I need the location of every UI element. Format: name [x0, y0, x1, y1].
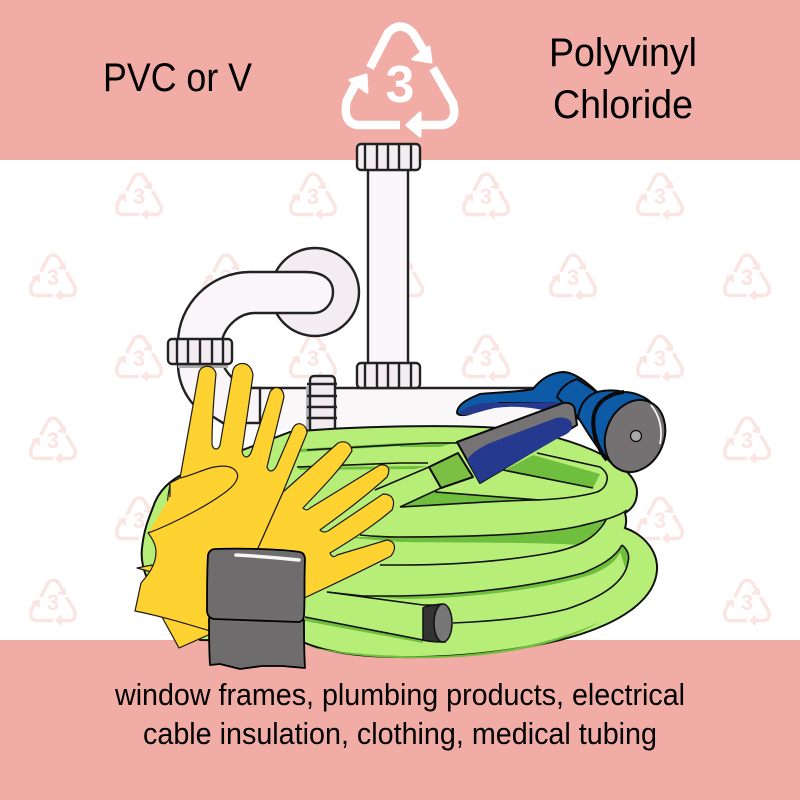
trigger lever — [457, 372, 597, 420]
glove thumb — [148, 466, 238, 533]
elbow collar — [168, 338, 232, 365]
illustration: PVC pipes — [168, 143, 540, 432]
watermark pattern: faint recycling code 3 symbols: 3 — [47, 428, 59, 453]
illustration: hose end connector — [423, 604, 452, 642]
watermark pattern: faint recycling code 3 symbols: 3 — [47, 265, 59, 290]
grey grip — [457, 403, 577, 483]
caption: uses of PVC — [114, 677, 685, 751]
illustration: grey duct tape roll — [207, 549, 305, 669]
wall flange disc — [271, 248, 359, 336]
watermark pattern: faint recycling code 3 symbols — [31, 174, 769, 625]
watermark pattern: faint recycling code 3 symbols: 3 — [133, 184, 145, 209]
hose neck to nozzle — [375, 467, 441, 507]
right glove — [250, 442, 394, 610]
nozzle highlight — [651, 405, 661, 444]
icon: recycling code 3 — [346, 26, 454, 136]
top banner — [0, 0, 800, 160]
back cuff flap — [137, 565, 215, 648]
heading: Polyvinyl Chloride: Polyvinyl — [549, 31, 697, 75]
watermark pattern: faint recycling code 3 symbols: 3 — [47, 590, 59, 615]
illustration: green garden hose — [142, 426, 657, 658]
heading: Polyvinyl Chloride: Chloride — [553, 83, 693, 127]
bottom banner — [0, 640, 800, 800]
watermark pattern: faint recycling code 3 symbols: 3 — [741, 590, 753, 615]
watermark pattern: faint recycling code 3 symbols: 3 — [567, 265, 579, 290]
top collar — [357, 143, 420, 171]
left glove — [135, 363, 307, 640]
blue grip — [467, 417, 572, 483]
heading: PVC or V: PVC or V — [103, 56, 252, 100]
watermark pattern: faint recycling code 3 symbols: 3 — [480, 184, 492, 209]
watermark pattern: faint recycling code 3 symbols: 3 — [654, 508, 666, 533]
watermark pattern: faint recycling code 3 symbols: 3 — [307, 346, 319, 371]
tape highlight — [236, 555, 299, 560]
green neck — [429, 453, 473, 488]
watermark pattern: faint recycling code 3 symbols: 3 — [307, 184, 319, 209]
hose coil outlines — [307, 443, 457, 450]
icon: recycling code 3: 3 — [386, 56, 414, 114]
bottom collar — [357, 362, 420, 389]
nozzle head — [578, 390, 652, 470]
heading: Polyvinyl Chloride — [549, 31, 697, 127]
watermark pattern: faint recycling code 3 symbols: 3 — [654, 184, 666, 209]
illustration: spray nozzle — [429, 372, 676, 488]
nozzle ring — [593, 392, 624, 460]
horizontal pipe — [230, 388, 540, 430]
caption: uses of PVC: cable insulation, clothing, medical tubing — [143, 716, 657, 751]
elbow shadow — [178, 364, 228, 368]
nozzle hole — [630, 430, 642, 442]
watermark pattern: faint recycling code 3 symbols: 3 — [133, 508, 145, 533]
nozzle face — [594, 391, 676, 481]
watermark pattern: faint recycling code 3 symbols: 3 — [741, 265, 753, 290]
tape lower band — [209, 618, 305, 669]
caption: uses of PVC: window frames, plumbing products, electrical — [114, 677, 685, 712]
curved elbow pipe — [178, 272, 333, 423]
nozzle shoulder — [557, 379, 597, 417]
hose coil shadows — [297, 442, 629, 658]
watermark pattern: faint recycling code 3 symbols: 3 — [480, 346, 492, 371]
watermark pattern: faint recycling code 3 symbols: 3 — [654, 346, 666, 371]
watermark pattern: faint recycling code 3 symbols: 3 — [394, 265, 406, 290]
watermark pattern: faint recycling code 3 symbols: 3 — [220, 265, 232, 290]
junction collar — [306, 376, 337, 432]
watermark pattern: faint recycling code 3 symbols: 3 — [741, 428, 753, 453]
illustration: yellow rubber gloves — [135, 363, 394, 648]
watermark pattern: faint recycling code 3 symbols: 3 — [133, 346, 145, 371]
tape upper band — [207, 549, 305, 622]
trigger underside — [460, 402, 560, 415]
hose silhouette — [142, 426, 657, 657]
vertical pipe — [368, 168, 408, 365]
